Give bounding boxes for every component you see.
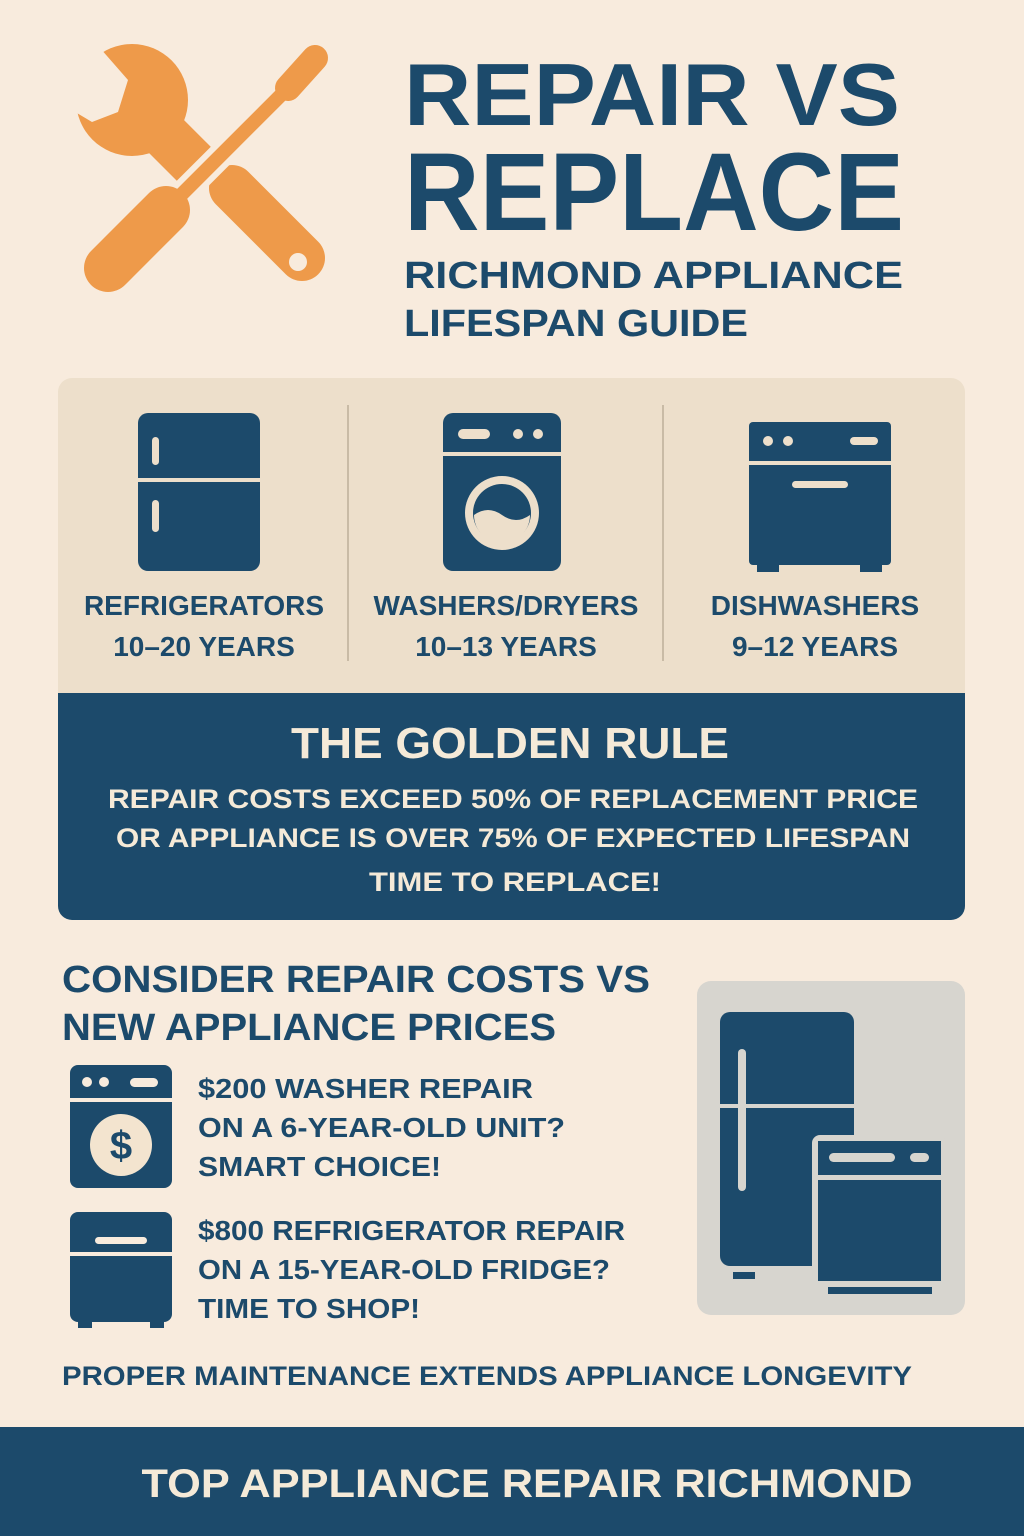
text: fridge example: $800 REFRIGERATOR REPAIR (198, 1215, 625, 1246)
panel: golden rule: TIME TO REPLACE! (369, 867, 661, 897)
text: dishwashers: DISHWASHERS (711, 590, 919, 621)
panel: golden rule: OR APPLIANCE IS OVER 75% OF EXPECTED LIFESPAN (116, 823, 910, 853)
title: REPLACE (404, 131, 904, 254)
footer: TOP APPLIANCE REPAIR RICHMOND (142, 1462, 912, 1506)
icon: washer with dollar (70, 1065, 172, 1188)
text: refrigerators: REFRIGERATORS (84, 590, 324, 621)
heading: consider costs: NEW APPLIANCE PRICES (62, 1007, 556, 1049)
heading: consider costs: CONSIDER REPAIR COSTS VS (62, 959, 650, 1001)
title: REPAIR VS (404, 45, 900, 144)
icon: wrench and screwdriver (55, 44, 315, 271)
text: fridge example: ON A 15-YEAR-OLD FRIDGE? (198, 1254, 610, 1285)
text: washers: WASHERS/DRYERS (373, 590, 639, 621)
text: washer example: ON A 6-YEAR-OLD UNIT? (198, 1112, 565, 1143)
icon: washer with dollar: $ (110, 1124, 132, 1168)
panel: golden rule: THE GOLDEN RULE (291, 719, 729, 768)
icon: washer (443, 413, 561, 571)
text: fridge example: TIME TO SHOP! (198, 1293, 420, 1324)
heading: consider costs (62, 959, 650, 1049)
text: dishwashers (711, 590, 919, 662)
text: washer example: SMART CHOICE! (198, 1151, 441, 1182)
text: dishwashers: 9–12 YEARS (732, 631, 898, 662)
text: refrigerators (84, 590, 324, 662)
footer (0, 1427, 1024, 1536)
subtitle: LIFESPAN GUIDE (404, 303, 748, 345)
text: maintenance note: PROPER MAINTENANCE EXTENDS APPLIANCE LONGEVITY (62, 1361, 912, 1391)
text: washers (373, 590, 639, 662)
icon: dishwasher (749, 422, 891, 572)
text: washer example: $200 WASHER REPAIR (198, 1073, 533, 1104)
icon: appliance (70, 1212, 172, 1328)
panel: lifespans (58, 378, 965, 920)
text: washer example (198, 1073, 565, 1182)
text: washers: 10–13 YEARS (415, 631, 597, 662)
title (404, 45, 904, 254)
icon: fridge and dishwasher box (697, 981, 965, 1315)
text: fridge example (198, 1215, 625, 1324)
subtitle (404, 255, 903, 345)
panel: golden rule: REPAIR COSTS EXCEED 50% OF REPLACEMENT PRICE (108, 784, 918, 814)
subtitle: RICHMOND APPLIANCE (404, 255, 903, 297)
panel: golden rule (58, 693, 965, 920)
icon: refrigerator (138, 413, 260, 571)
text: refrigerators: 10–20 YEARS (113, 631, 295, 662)
